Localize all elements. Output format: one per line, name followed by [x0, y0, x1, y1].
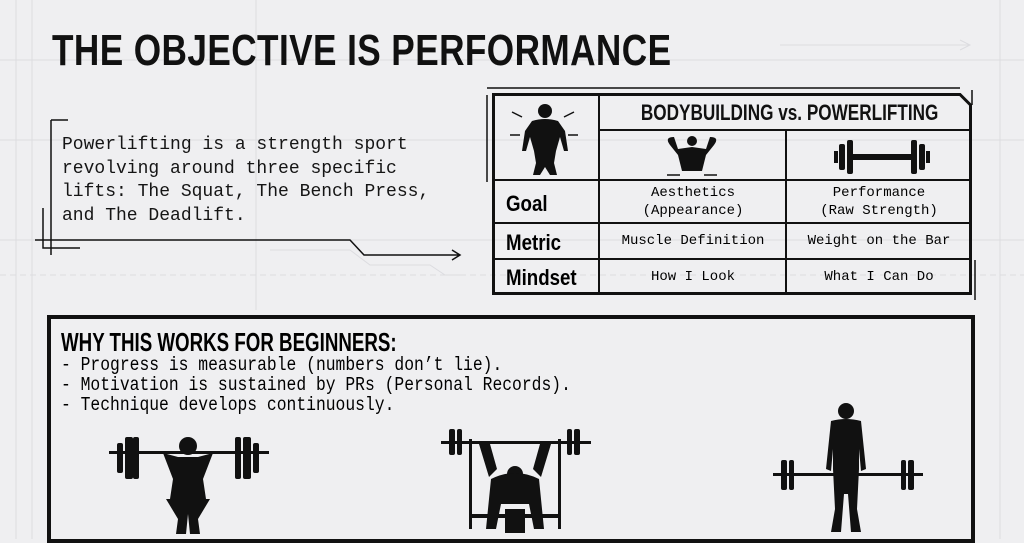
panel: beginners	[47, 315, 975, 543]
intro text	[62, 135, 429, 226]
icon: flexing	[667, 136, 717, 175]
text bracket and arrow	[35, 88, 975, 300]
intro text: and The Deadlift.	[62, 206, 246, 226]
comparison table: Goal	[506, 191, 548, 216]
title: THE OBJECTIVE IS PERFORMANCE	[52, 26, 671, 75]
intro text: lifts: The Squat, The Bench Press,	[62, 182, 429, 202]
comparison table: (Raw Strength)	[820, 203, 938, 219]
comparison table: What I Can Do	[824, 269, 934, 285]
icon: bodybuilder	[510, 104, 578, 175]
bullets: - Progress is measurable (numbers don’t lie).	[61, 354, 502, 376]
comparison table: Weight on the Bar	[808, 233, 950, 249]
comparison table: (Appearance)	[643, 203, 743, 219]
comparison table: Mindset	[506, 265, 577, 290]
icon: barbell	[834, 140, 930, 174]
bullets: - Motivation is sustained by PRs (Personal Records).	[61, 374, 571, 396]
comparison table: Performance	[833, 185, 925, 201]
comparison table: Metric	[506, 230, 561, 255]
intro text: Powerlifting is a strength sport	[62, 135, 408, 155]
bullets	[61, 354, 571, 416]
bullets: - Technique develops continuously.	[61, 394, 394, 416]
intro text: revolving around three specific	[62, 158, 397, 178]
heading: WHY THIS WORKS FOR BEGINNERS:	[61, 327, 397, 357]
table header: BODYBUILDING vs. POWERLIFTING	[641, 100, 938, 125]
comparison table: Aesthetics	[651, 185, 735, 201]
icon: deadlift	[773, 403, 923, 532]
icon: squat	[109, 437, 269, 534]
comparison table	[492, 93, 972, 295]
comparison table: How I Look	[651, 269, 735, 285]
comparison table: Muscle Definition	[622, 233, 764, 249]
icon: bench press	[441, 429, 591, 533]
